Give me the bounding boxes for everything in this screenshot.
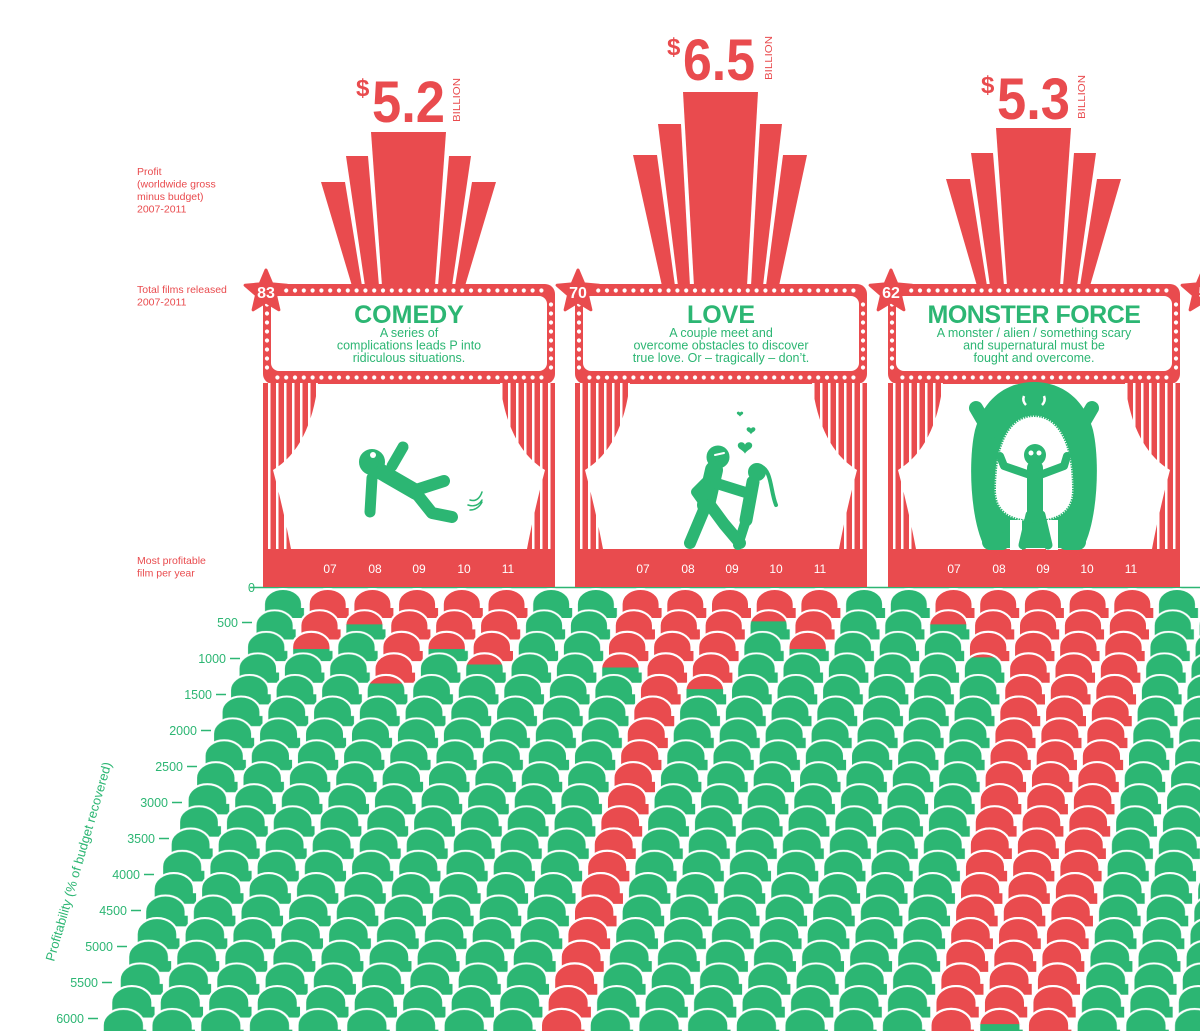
y axis labels: 5000 <box>85 940 113 954</box>
seat grid <box>99 588 1200 1031</box>
icon: hearts <box>737 412 755 454</box>
y axis labels: 3000 <box>140 796 168 810</box>
label: most profitable: Most profitable <box>137 555 206 567</box>
profit value: $5.2 billion: BILLION <box>452 78 463 122</box>
y axis labels: 6000 <box>56 1012 84 1026</box>
marquee frame <box>888 284 1180 587</box>
year labels: monster force: 11 <box>1125 562 1138 576</box>
description: monster force: and supernatural must be <box>963 338 1105 352</box>
y axis labels: 0 <box>248 581 255 595</box>
year labels: monster force: 10 <box>1080 562 1094 576</box>
year labels: comedy: 09 <box>412 562 426 576</box>
year labels: love: 10 <box>769 562 783 576</box>
title: monster force: MONSTER FORCE <box>928 301 1140 329</box>
title: love: LOVE <box>687 301 755 329</box>
profit value: $5.2 billion: 5.2 <box>372 70 445 135</box>
star: next theater <box>1182 270 1200 310</box>
profit value: $6.5 billion: $ <box>667 34 681 61</box>
profit value: $5.3 billion: 5.3 <box>997 67 1070 132</box>
icon: dancing couple <box>690 449 776 545</box>
y axis labels: 4000 <box>112 868 140 882</box>
y axis labels: 1500 <box>184 688 212 702</box>
label: profit: (worldwide gross <box>137 178 216 190</box>
profit value: $6.5 billion: 6.5 <box>683 28 755 93</box>
theater: monster force <box>870 67 1180 587</box>
description: love: overcome obstacles to discover <box>633 338 809 352</box>
description: love: A couple meet and <box>669 326 773 340</box>
icon: falling man <box>362 447 482 517</box>
profit value: $5.3 billion: $ <box>981 72 995 99</box>
marquee frame <box>263 284 555 587</box>
description: comedy: complications leads P into <box>337 338 481 352</box>
description: monster force: fought and overcome. <box>974 351 1094 365</box>
y axis labels: 2000 <box>169 724 197 738</box>
y axis labels: 1000 <box>198 652 226 666</box>
description: comedy: A series of <box>380 326 438 340</box>
star: 70 films <box>557 270 599 310</box>
year labels: comedy <box>323 562 515 576</box>
profit value: $5.2 billion: $ <box>356 75 370 102</box>
baseline axis line <box>250 586 1200 588</box>
label: most profitable: film per year <box>137 568 195 580</box>
y axis labels: 3500 <box>127 832 155 846</box>
icon: monster <box>971 382 1097 550</box>
theater: love <box>557 28 867 587</box>
description: monster force: A monster / alien / something scary <box>937 326 1131 340</box>
star: 83 films <box>245 270 287 310</box>
y axis labels: 500 <box>217 616 238 630</box>
description: love: true love. Or – tragically – don’t. <box>633 351 809 365</box>
year labels: love: 11 <box>814 562 827 576</box>
y axis labels: 5500 <box>70 976 98 990</box>
year labels: comedy: 08 <box>368 562 382 576</box>
y axis labels: 4500 <box>99 904 127 918</box>
label: profit: Profit <box>137 166 162 178</box>
y axis title: Profitability (% of budget recovered) <box>42 760 115 963</box>
star: 83 films: 83 <box>257 285 275 302</box>
year labels: monster force: 09 <box>1036 562 1050 576</box>
star: 62 films <box>870 270 912 310</box>
label: total films: 2007-2011 <box>137 296 187 308</box>
year labels: monster force: 08 <box>992 562 1006 576</box>
year labels: love: 08 <box>681 562 695 576</box>
theater: next (cropped) <box>1182 270 1200 587</box>
marquee frame <box>575 284 867 587</box>
profit value: $5.3 billion: BILLION <box>1077 75 1088 119</box>
crown: love profit <box>633 92 807 286</box>
crown: monster force profit <box>946 128 1121 286</box>
year labels: monster force: 07 <box>947 562 961 576</box>
year labels: comedy: 11 <box>502 562 515 576</box>
year labels: monster force <box>947 562 1138 576</box>
theater: comedy <box>245 70 555 587</box>
label: total films: Total films released <box>137 284 227 296</box>
year labels: love: 09 <box>725 562 739 576</box>
label: profit: 2007-2011 <box>137 204 187 216</box>
star: 62 films: 62 <box>882 285 900 302</box>
year labels: love: 07 <box>636 562 650 576</box>
year labels: comedy: 10 <box>457 562 471 576</box>
y axis labels: 2500 <box>155 760 183 774</box>
title: comedy: COMEDY <box>354 301 464 329</box>
crown: comedy profit <box>321 132 496 286</box>
star: 70 films: 70 <box>569 285 587 302</box>
profit value: $6.5 billion: BILLION <box>764 36 775 80</box>
description: comedy: ridiculous situations. <box>353 351 465 365</box>
year labels: comedy: 07 <box>323 562 337 576</box>
year labels: love <box>636 562 827 576</box>
label: profit: minus budget) <box>137 191 204 203</box>
y axis labels <box>56 581 255 1026</box>
